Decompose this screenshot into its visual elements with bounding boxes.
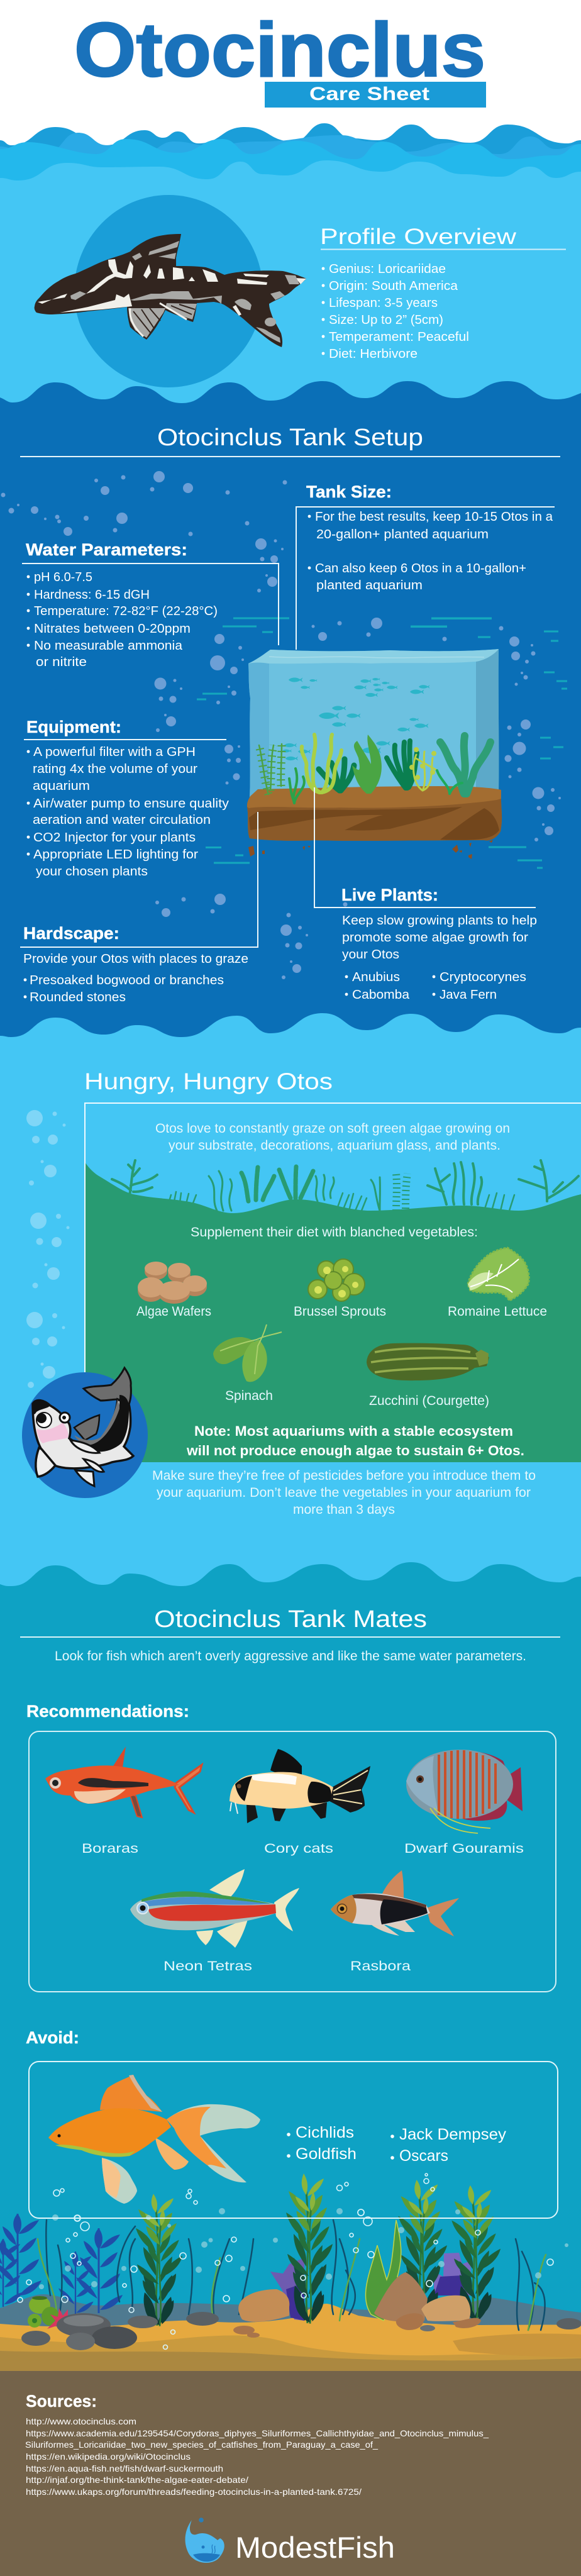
tiny fish school — [282, 677, 430, 760]
plant silhouettes — [112, 1160, 578, 1211]
panel: tank size — [306, 482, 553, 592]
text: live plants list: Anubius — [352, 970, 400, 984]
green barrels — [28, 2296, 59, 2328]
list: equipment: rating 4x the volume of your — [33, 762, 197, 776]
list: avoid fish: Jack Dempsey — [399, 2126, 507, 2143]
note: stable ecosystem: will not produce enough algae to sustain 6+ Otos. — [186, 1443, 524, 1458]
heading: tank mates — [20, 1606, 560, 1663]
list: profile facts: Lifespan: 3-5 years — [329, 296, 438, 310]
list: water parameters: Hardness: 6-15 dGH — [34, 588, 150, 602]
text: live plants list — [342, 914, 537, 1002]
heading: sources: Sources: — [26, 2392, 97, 2411]
list: source links: https://www.ukaps.org/forum/threads/feeding-otocinclus-in-a-planted-tank.6725/ — [26, 2487, 362, 2497]
list: equipment: Appropriate LED lighting for — [33, 848, 198, 862]
food: romaine lettuce — [448, 1248, 547, 1319]
panel border: hungry otos — [85, 1103, 581, 1374]
list: water parameters: No measurable ammonia — [34, 639, 183, 653]
list: water parameters: pH 6.0-7.5 — [34, 570, 92, 584]
subtitle ribbon: Care Sheet — [265, 82, 486, 108]
food: zucchini: Zucchini (Courgette) — [369, 1394, 489, 1408]
heading: tank setup: Otocinclus Tank Setup — [157, 425, 423, 451]
food: spinach — [213, 1324, 282, 1403]
list: profile facts: Temperament: Peaceful — [329, 330, 469, 344]
title block — [74, 7, 486, 108]
leafy plant behind rocks — [365, 2220, 401, 2321]
list: water parameters: Temperature: 72-82°F (22-28°C) — [34, 604, 218, 618]
text: supplement heading: Supplement their diet with blanched vegetables: — [191, 1225, 478, 1240]
text: pesticide advice — [152, 1468, 536, 1517]
list: source links — [25, 2416, 489, 2497]
list: water parameters: Nitrates between 0-20ppm — [34, 622, 191, 636]
food: zucchini — [367, 1343, 489, 1408]
food: spinach: Spinach — [225, 1389, 273, 1403]
teal water dashes — [197, 618, 567, 869]
text: pesticide advice: your aquarium. Don’t leave the vegetables in your aquarium for — [157, 1485, 531, 1500]
list: water parameters: or nitrite — [36, 655, 87, 669]
illustration: hungry oto in circle — [22, 1368, 148, 1498]
text: hardscape list: Presoaked bogwood or branches — [30, 974, 224, 987]
list: equipment — [27, 745, 229, 879]
food: algae wafers — [136, 1262, 211, 1319]
list: avoid fish: Oscars — [399, 2147, 448, 2165]
panel: hungry otos background — [0, 1013, 581, 1610]
panel: avoid — [29, 2062, 558, 2221]
text: live plants list: Keep slow growing plants to help — [342, 914, 537, 928]
purple corals — [270, 2253, 472, 2321]
list: profile facts: Genius: Loricariidae — [329, 262, 446, 276]
illustration: aquarium — [247, 649, 502, 859]
list: profile facts: Size: Up to 2” (5cm) — [329, 313, 443, 327]
fish: neon tetra: Neon Tetras — [163, 1959, 252, 1974]
text: live plants list: Cabomba — [352, 988, 410, 1002]
list: equipment: CO2 Injector for your plants — [33, 831, 196, 845]
panel: equipment — [26, 718, 229, 879]
text: live plants list: your Otos — [342, 948, 399, 962]
text: algae intro — [155, 1121, 510, 1153]
grey rocks — [21, 2312, 581, 2350]
title: Otocinclus: Otocinclus — [74, 7, 485, 92]
fish: cory cats: Cory cats — [264, 1841, 333, 1856]
list: avoid fish: Cichlids — [296, 2124, 354, 2141]
list: equipment: aquarium — [33, 779, 90, 793]
heading: profile overview: Profile Overview — [320, 225, 517, 249]
text: algae intro: your substrate, decorations, aquarium glass, and plants. — [169, 1138, 501, 1153]
text: hardscape list: Provide your Otos with places to graze — [23, 952, 248, 966]
fish: rasbora: Rasbora — [350, 1959, 411, 1974]
fish: boraras: Boraras — [82, 1841, 138, 1856]
food: algae wafers: Algae Wafers — [136, 1304, 211, 1319]
panel: sources footer — [0, 2371, 581, 2576]
text: pesticide advice: Make sure they’re free of pesticides before you introduce them to — [152, 1468, 536, 1483]
connector: equipment and live plants lines — [20, 740, 536, 947]
sand — [0, 2304, 581, 2371]
kelp plants — [136, 2174, 501, 2326]
note: stable ecosystem: Note: Most aquariums with a stable ecosystem — [194, 1423, 513, 1439]
logo: modestfish — [185, 2518, 395, 2564]
panel: hardscape — [23, 924, 248, 1004]
panel: profile overview background — [0, 160, 581, 428]
small rings in box — [53, 2174, 434, 2221]
icon: blue disc behind fish — [74, 195, 263, 387]
bubbles: hungry otos — [26, 1110, 69, 1388]
heading: avoid: Avoid: — [26, 2028, 79, 2047]
fish: dwarf gourami — [404, 1750, 524, 1856]
fish: neon tetra — [130, 1869, 299, 1974]
panel: recommendations — [29, 1731, 556, 1992]
list: source links: https://en.wikipedia.org/wiki/Otocinclus — [26, 2451, 191, 2462]
panel: water parameters — [26, 540, 218, 669]
panel: tank mates background — [0, 1562, 581, 2374]
text: pesticide advice: more than 3 days — [293, 1502, 395, 1517]
label: hardscape: Hardscape: — [23, 924, 119, 943]
panel: profile overview text — [320, 225, 566, 361]
list: equipment: aeration and water circulation — [33, 813, 211, 827]
background ridge — [0, 2294, 581, 2340]
list: source links: http://www.otocinclus.com — [26, 2416, 136, 2426]
dark water weed — [38, 2220, 546, 2330]
list: tank size — [308, 510, 553, 592]
list: equipment: your chosen plants — [36, 865, 148, 879]
illustration: otocinclus fish — [35, 234, 306, 347]
note: stable ecosystem — [186, 1423, 524, 1458]
fish: cory cats — [230, 1749, 370, 1856]
label: equipment: Equipment: — [26, 718, 121, 736]
bubbles: tank setup — [1, 471, 561, 979]
list: water parameters — [27, 570, 218, 669]
heading: recommendations: Recommendations: — [26, 1702, 189, 1721]
top waves — [0, 123, 581, 214]
list: profile facts — [321, 249, 566, 361]
illustration: seabed — [0, 2174, 581, 2371]
list: equipment: Air/water pump to ensure quality — [33, 797, 229, 811]
panel: tank setup background — [0, 381, 581, 1069]
text: live plants list: Cryptocorynes — [440, 970, 526, 984]
food: romaine lettuce: Romaine Lettuce — [448, 1304, 547, 1319]
label: water parameters: Water Parameters: — [26, 540, 187, 559]
fish: boraras — [45, 1746, 202, 1856]
text: hardscape list: Rounded stones — [30, 991, 126, 1004]
text: algae intro: Otos love to constantly graze on soft green algae growing on — [155, 1121, 510, 1136]
subtitle ribbon: Care Sheet: Care Sheet — [309, 84, 429, 104]
list: equipment: A powerful filter with a GPH — [33, 745, 196, 759]
falling soil crumbs — [248, 840, 493, 859]
wordmark: ModestFish — [235, 2531, 395, 2564]
text: live plants list: Java Fern — [440, 988, 497, 1002]
list: source links: https://www.academia.edu/1295454/Corydoras_diphyes_Siluriformes_Callichthyidae_and_Otocinclus_mimulus_ — [26, 2428, 489, 2438]
connector: tank size and water lines — [22, 507, 555, 650]
substrate — [247, 786, 502, 841]
text: hardscape list — [23, 952, 248, 1004]
tank glass — [248, 649, 499, 799]
text: tank mates intro: Look for fish which aren’t overly aggressive and like the same water parameters. — [55, 1649, 526, 1663]
label: live plants: Live Plants: — [341, 886, 438, 904]
fish: goldfish — [48, 2075, 260, 2204]
list: tank size: For the best results, keep 10-15 Otos in a — [315, 510, 553, 524]
list: tank size: planted aquarium — [316, 579, 423, 592]
label: tank size: Tank Size: — [306, 482, 392, 501]
list: tank size: Can also keep 6 Otos in a 10-gallon+ — [315, 562, 526, 575]
food: brussel sprouts: Brussel Sprouts — [294, 1304, 386, 1319]
bubbles — [18, 2208, 568, 2350]
heading: hungry otos: Hungry, Hungry Otos — [84, 1069, 333, 1094]
panel: live plants — [341, 886, 537, 1002]
list: profile facts: Diet: Herbivore — [329, 347, 418, 361]
food: brussel sprouts — [294, 1259, 386, 1319]
list: tank size: 20-gallon+ planted aquarium — [316, 528, 489, 541]
brown rocks — [233, 2272, 481, 2338]
list: profile facts: Origin: South America — [329, 279, 458, 293]
list: source links: https://en.aqua-fish.net/fish/dwarf-suckermouth — [26, 2463, 223, 2473]
red anemone — [47, 2308, 68, 2329]
panel: algae green seabed — [85, 1160, 581, 1462]
fish: rasbora — [331, 1870, 459, 1974]
list: source links: Siluriformes_Loricariidae_two_new_species_of_catfishes_from_Paraguay_a_case_of_ — [25, 2440, 378, 2450]
list: avoid fish — [287, 2124, 507, 2165]
list: source links: http://injaf.org/the-think-tank/the-algae-eater-debate/ — [26, 2475, 248, 2485]
text: live plants list: promote some algae growth for — [342, 931, 528, 945]
list: avoid fish: Goldfish — [296, 2145, 357, 2163]
fish: dwarf gourami: Dwarf Gouramis — [404, 1841, 524, 1856]
aquarium plants — [259, 735, 490, 803]
heading: tank mates: Otocinclus Tank Mates — [154, 1606, 427, 1633]
dark blue plants — [0, 2214, 123, 2315]
